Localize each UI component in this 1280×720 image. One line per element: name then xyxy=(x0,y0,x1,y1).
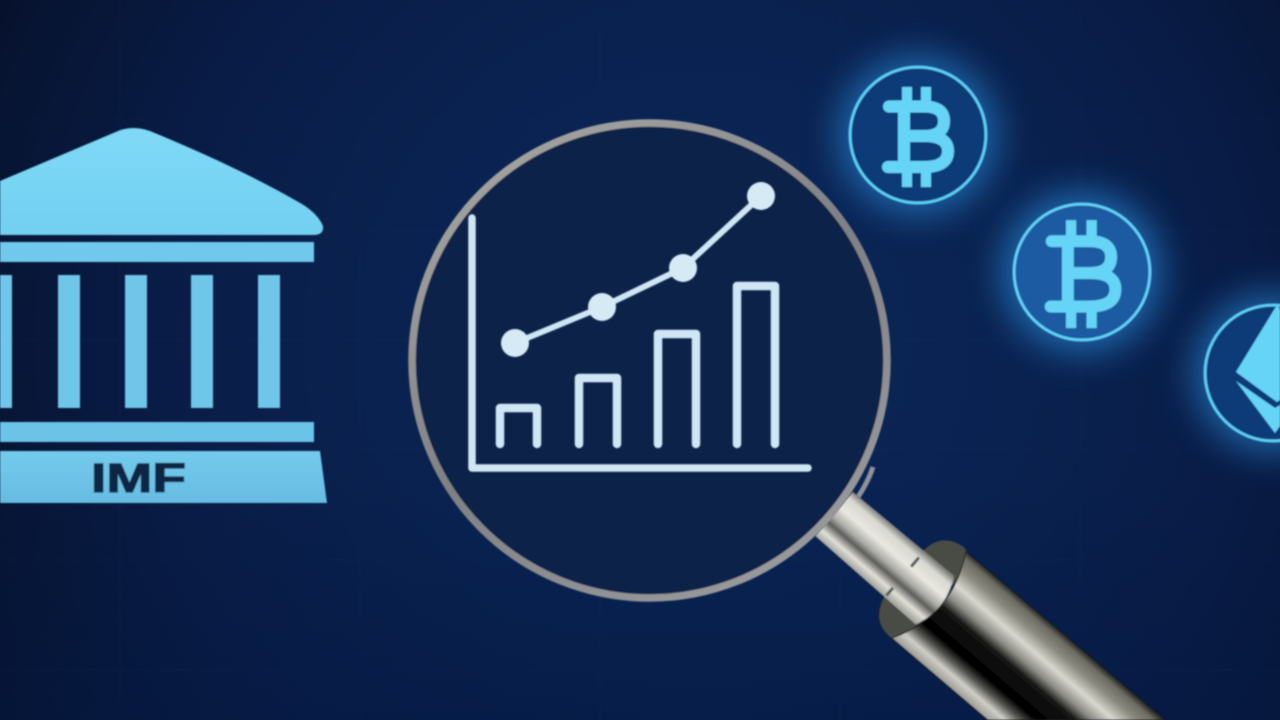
building roof xyxy=(0,128,323,235)
icon: magnifying glass handle xyxy=(814,490,1165,720)
building entablature xyxy=(0,242,314,262)
bars xyxy=(500,286,775,444)
neck seams xyxy=(886,557,919,595)
grip end cap xyxy=(867,529,977,646)
icon: bitcoin coin middle xyxy=(1002,192,1162,352)
building lower band xyxy=(0,422,314,442)
chart axes xyxy=(472,218,808,468)
building base xyxy=(0,451,327,503)
handle neck xyxy=(814,490,961,629)
handle grip xyxy=(892,552,1165,720)
chart: growth line and bars xyxy=(472,182,808,468)
lens ring xyxy=(412,123,887,598)
icon: ethereum coin xyxy=(1193,293,1280,453)
label: IMF: IMF xyxy=(91,455,186,501)
icon: bitcoin coin top xyxy=(838,55,998,215)
trend line xyxy=(501,182,775,357)
ring outer lip xyxy=(858,467,873,497)
building columns xyxy=(0,275,280,408)
icon: IMF building xyxy=(0,128,327,503)
magnifying glass lens xyxy=(412,123,887,598)
lens glass xyxy=(412,124,886,598)
